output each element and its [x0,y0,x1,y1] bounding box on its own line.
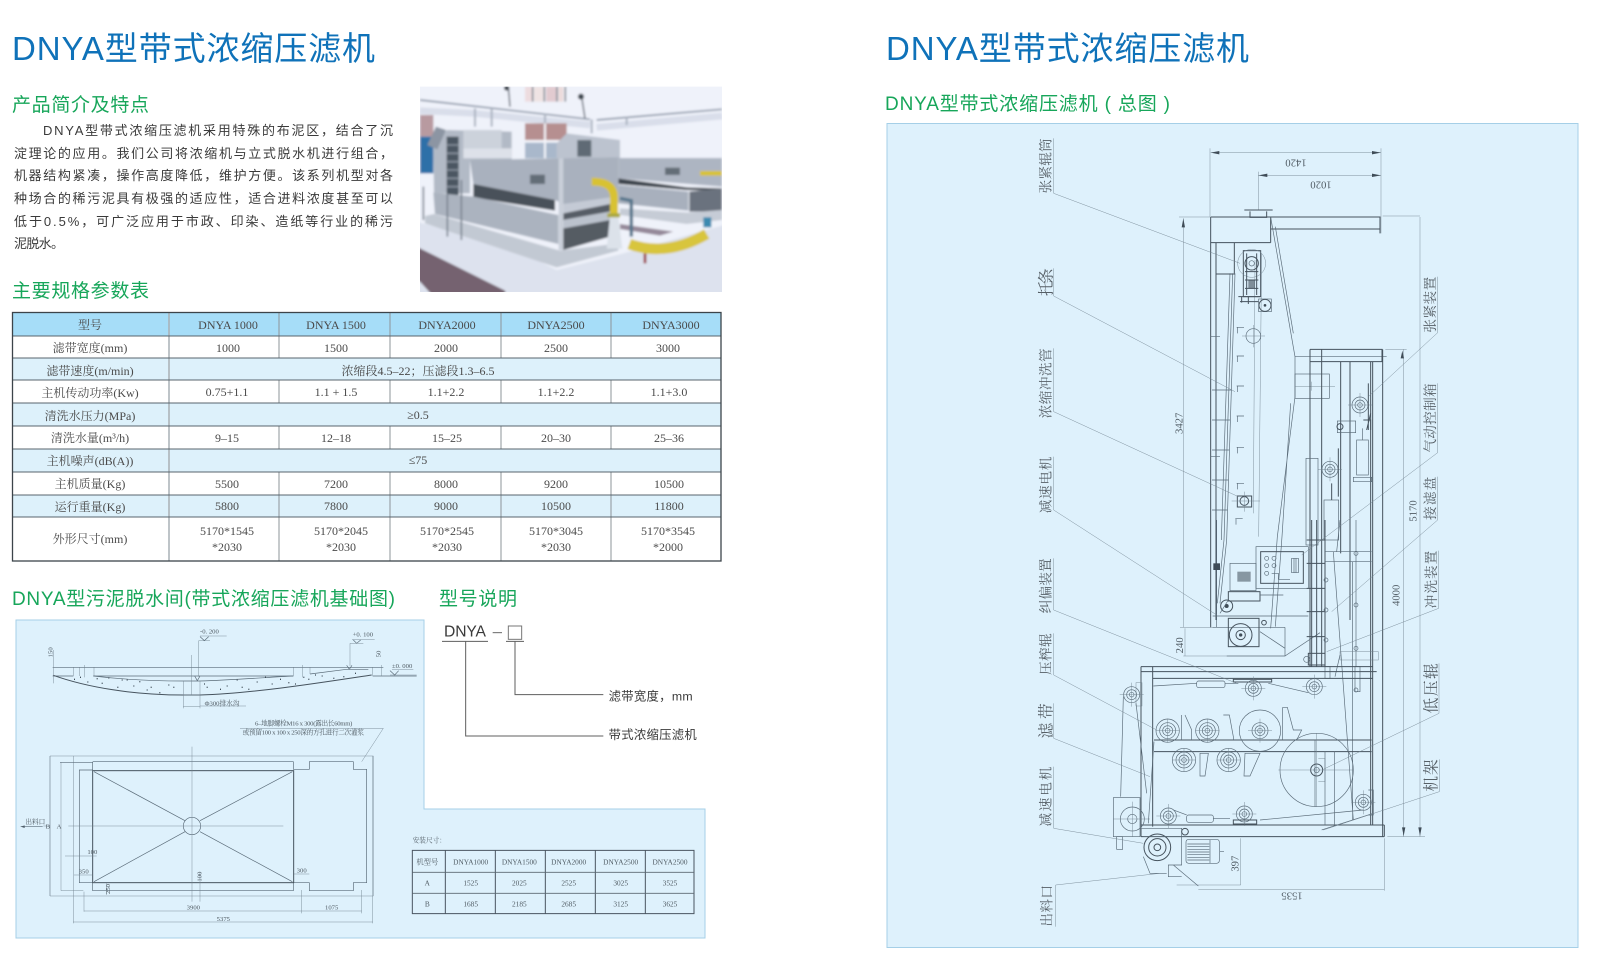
table: main specifications: ≥0.5 [407,408,429,422]
table: main specifications: 11800 [654,499,684,513]
table: main specifications: DNYA3000 [642,318,700,332]
section view: -0. 200 [200,628,220,635]
table: main specifications: 9200 [544,477,568,491]
plan view: A [57,824,62,831]
section view [48,628,417,708]
table: main specifications: 滤带宽度(mm) [53,340,127,355]
table: installation dimensions: DNYA1000 [453,858,489,867]
lower frame [1141,667,1384,837]
table: installation dimensions [412,836,694,914]
anchor bolt note: 或预留100 x 100 x 250深的方孔进行二次灌浆 [243,728,364,737]
plan view [21,747,373,923]
left labels: 出料口 [1040,885,1055,927]
table: main specifications: 10500 [654,477,684,491]
right labels: 接滤盘 [1422,476,1438,520]
right tower [1295,349,1383,837]
table: installation dimensions: DNYA2500 [652,858,688,867]
table: installation dimensions: 3025 [613,879,628,888]
chart: general machine drawing [1037,138,1441,927]
table: installation dimensions: DNYA2500 [603,858,639,867]
text block: product introduction: 淀理论的应用。我们公司将浓缩机与立式脱水机进行组合， [14,146,393,161]
table: main specifications: 5170*2545 [420,524,474,538]
right labels: 冲洗装置 [1423,550,1439,608]
left labels: 纠偏装置 [1038,558,1054,613]
dimension lines: 1535 [1281,890,1303,901]
table: main specifications: 25–36 [654,431,684,445]
table: installation dimensions: 3125 [613,900,628,909]
table: installation dimensions: 2525 [561,879,576,888]
table: main specifications: 2000 [434,341,458,355]
table: main specifications: 型号 [78,317,102,332]
table: main specifications: ≤75 [409,453,427,467]
title: right page: DNYA型带式浓缩压滤机 [886,30,1249,67]
left labels [1037,138,1240,927]
table: main specifications: *2030 [212,540,242,554]
table: main specifications: 1000 [216,341,240,355]
table: main specifications: 清洗水量(m³/h) [51,430,129,445]
table: main specifications: DNYA 1500 [306,318,366,332]
heading: product introduction: 产品简介及特点 [12,94,149,116]
table: installation dimensions: 机型号 [416,858,439,867]
table: installation dimensions: 1685 [463,900,478,909]
chart: general machine drawing: 低压辊 [1423,663,1441,713]
text block: product introduction: 种场合的稀污泥具有极强的适应性，适合进料浓度甚至可以 [14,191,393,206]
section view: 50 [375,650,382,657]
table: main specifications: 运行重量(Kg) [55,499,125,514]
heading: general drawing: DNYA型带式浓缩压滤机 ( 总图 ) [885,93,1170,115]
diagram: model designation: 带式浓缩压滤机 [609,727,697,742]
table: main specifications: 1.1+2.2 [538,385,574,399]
control box and lower drive [1113,520,1384,886]
table: main specifications: 5170*1545 [200,524,254,538]
table: main specifications: 7200 [324,477,348,491]
heading: specification table: 主要规格参数表 [12,280,149,302]
left labels: 张紧辊筒 [1038,138,1054,193]
photo: installed belt thickener filter presses [420,86,722,292]
table: main specifications: 浓缩段4.5–22；压滤段1.3–6.5 [341,363,495,378]
heading: foundation drawing: DNYA型污泥脱水间(带式浓缩压滤机基础图) [12,588,395,610]
table: main specifications: 15–25 [432,431,462,445]
table: main specifications: DNYA 1000 [198,318,258,332]
heading: model explanation: 型号说明 [439,588,517,610]
diagram: model designation: 滤带宽度，mm [609,689,693,704]
table: main specifications: 1500 [324,341,348,355]
section view: Φ300排水沟 [205,698,240,707]
dimension lines: 5170 [1409,500,1420,522]
dimension lines: 1020 [1310,178,1332,189]
table: main specifications: DNYA2000 [418,318,476,332]
table: installation dimensions: 3525 [663,879,678,888]
table: main specifications: 滤带速度(m/min) [46,363,134,378]
left labels: 压榨辊 [1038,633,1054,675]
chart: general machine drawing: 机架 [1423,759,1441,792]
dimension lines: 4000 [1392,585,1403,606]
right labels: 张紧装置 [1422,276,1438,333]
table: main specifications: *2030 [326,540,356,554]
table: main specifications [12,312,721,561]
plan view: 250 [105,883,112,894]
table: main specifications: 8000 [434,477,458,491]
left labels: 浓缩冲洗管 [1039,348,1054,418]
section view: ±0. 000 [392,663,413,670]
anchor bolt note [240,718,383,762]
panel: general drawing background [887,124,1578,948]
text block: product introduction: 机器结构紧凑，操作高度降低，维护方便。该系列机型对各 [14,168,393,183]
plan view: 3900 [187,905,201,912]
text block: product introduction: DNYA型带式浓缩压滤机采用特殊的布泥区，结合了沉 [43,123,393,138]
text block: product introduction [14,123,393,251]
dimension lines [1174,148,1425,901]
dimension lines: 3427 [1174,412,1185,434]
left labels: 滤带 [1037,703,1055,738]
plan view: 5375 [217,916,231,923]
left labels: 托条 [1037,268,1055,296]
table: main specifications: 主机传动功率(Kw) [41,385,139,400]
right labels [1302,276,1439,652]
table: main specifications: 主机噪声(dB(A)) [47,453,133,468]
diagram: model designation: DNYA [444,624,487,641]
table: installation dimensions: 2185 [512,900,527,909]
table: main specifications: 9–15 [215,431,239,445]
table: installation dimensions: 3625 [663,900,678,909]
dimension lines: 240 [1175,637,1186,653]
table: main specifications: 1.1 + 1.5 [315,385,357,399]
diagram: model designation [442,624,697,742]
table: main specifications: 7800 [324,499,348,513]
plan view: 1075 [325,904,339,911]
upper thickening section [1211,210,1387,628]
plan view: 出料口 [25,817,45,826]
table: main specifications: 清洗水压力(MPa) [45,408,135,423]
table: installation dimensions: B [425,900,430,909]
table: main specifications: 3000 [656,341,680,355]
table: installation dimensions: 安装尺寸： [413,836,446,845]
plan view: 100 [87,849,98,856]
table: installation dimensions: 2685 [561,900,576,909]
table: main specifications: 12–18 [321,431,351,445]
title: left page: DNYA型带式浓缩压滤机 [12,30,375,67]
chart: foundation section and plan drawing [21,628,417,923]
dimension lines: 397 [1230,855,1241,872]
anchor bolt note: 6–地脚螺栓M16 x 300(露出长60mm) [255,718,352,727]
table: main specifications: 主机质量(Kg) [55,476,125,491]
left labels: 减速电机 [1038,456,1054,513]
table: installation dimensions: 1525 [463,879,478,888]
left labels: 减速电机 [1038,766,1054,827]
dimension lines: 1420 [1285,156,1307,167]
right labels: 气动控制箱 [1422,383,1438,453]
table: installation dimensions: A [425,879,431,888]
table: installation dimensions: DNYA2000 [551,858,587,867]
table: main specifications: 5800 [215,499,239,513]
text block: product introduction: 泥脱水。 [14,236,64,251]
table: main specifications: 9000 [434,499,458,513]
table: main specifications: 1.1+2.2 [428,385,464,399]
table: installation dimensions: DNYA1500 [502,858,537,867]
table: main specifications: 5170*3045 [529,524,583,538]
table: main specifications: 2500 [544,341,568,355]
table: main specifications: *2030 [541,540,571,554]
table: main specifications: 20–30 [541,431,571,445]
plan view: 300 [297,867,307,874]
table: main specifications: 外形尺寸(mm) [53,531,127,546]
table: main specifications: 5170*3545 [641,524,695,538]
table: main specifications: 0.75+1.1 [206,385,248,399]
section view: 150 [48,647,55,657]
panel: foundation drawing background [16,620,705,938]
table: main specifications: 5500 [215,477,239,491]
plan view: 100 [196,871,203,882]
table: main specifications: *2030 [432,540,462,554]
table: main specifications: DNYA2500 [527,318,585,332]
text block: product introduction: 低于0.5%，可广泛应用于市政、印染、造纸等行业的稀污 [14,214,393,229]
table: main specifications: *2000 [653,540,683,554]
table: main specifications: 5170*2045 [314,524,368,538]
table: installation dimensions: 2025 [512,879,527,888]
plan view: 350 [79,868,89,875]
section view: +0. 100 [353,632,374,639]
plan view: B [46,824,51,831]
table: main specifications: 1.1+3.0 [651,385,687,399]
table: main specifications: 10500 [541,499,571,513]
